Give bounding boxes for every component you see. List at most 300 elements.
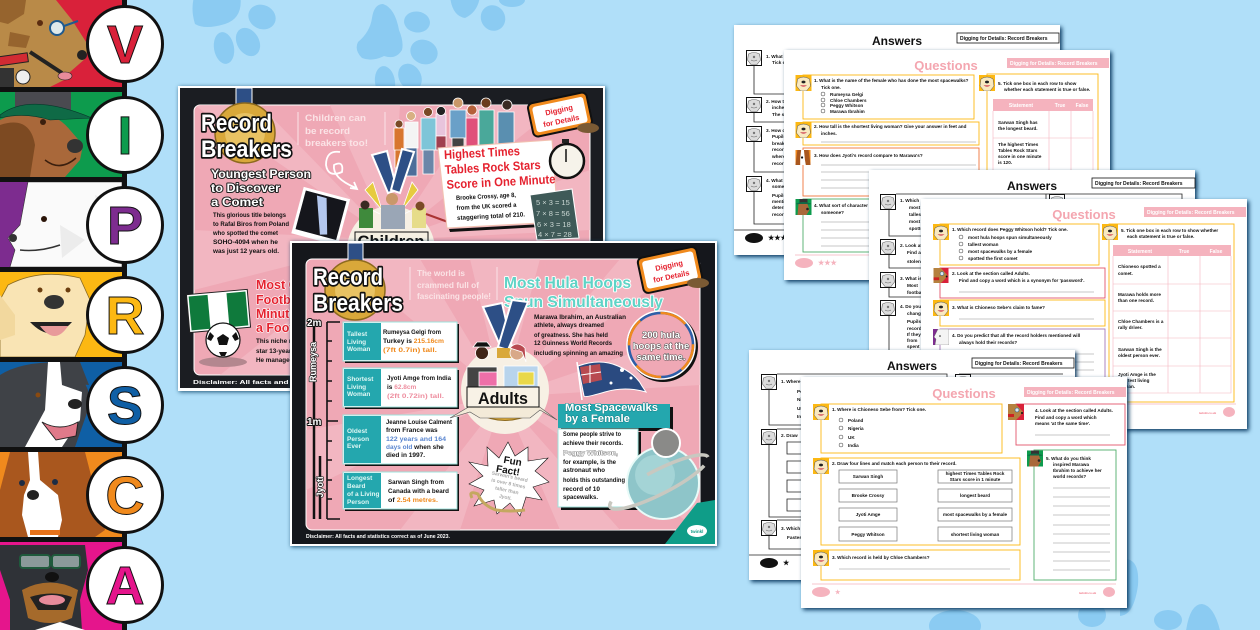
heading: most hula hoops: Spun Simultaneously xyxy=(504,294,663,311)
card: oldest person ever: Oldest xyxy=(347,428,368,435)
title: Breakers xyxy=(313,290,403,317)
intro text xyxy=(417,268,491,301)
answer icons xyxy=(746,50,762,192)
header box xyxy=(957,33,1059,43)
body: comet: This glorious title belongs xyxy=(213,212,286,219)
chalkboard xyxy=(530,189,579,240)
answer text: 2. Look at xyxy=(900,243,922,248)
card: oldest person ever: from France was xyxy=(386,427,438,434)
question 2: 2. How tall is the shortest living woman? Give your answer in feet and xyxy=(814,124,967,129)
card: oldest person ever: Person xyxy=(347,436,369,443)
callout: fun fact: Jyoti. xyxy=(498,493,513,502)
callout: 200 hula hoops xyxy=(627,311,698,382)
card: tallest living woman: Tallest xyxy=(347,331,368,338)
card: longest beard: Beard xyxy=(347,483,365,490)
body: hula hoops xyxy=(534,314,626,357)
question 5 with table: 5. Tick one box in each row to show whether xyxy=(1121,228,1218,233)
card: tallest living woman: Woman xyxy=(347,346,370,353)
answer text: football xyxy=(907,290,924,295)
intro text: Children can xyxy=(305,113,366,124)
question 5 with table: True xyxy=(1055,103,1065,109)
worksheet: questions 1 xyxy=(784,50,1110,280)
question 2 xyxy=(934,268,1105,298)
body: football: star 13-year-old xyxy=(256,348,303,355)
answer text: 3. What is xyxy=(900,276,922,281)
letter badge: R xyxy=(88,278,162,352)
card: longest beard: of a Living xyxy=(347,491,380,498)
answer text: 3. Which xyxy=(781,526,800,531)
heading: Questions xyxy=(914,58,978,73)
answer text: Nigeria xyxy=(797,397,813,402)
header box: Digging for Details: Record Breakers xyxy=(1095,181,1183,187)
disclaimer: Disclaimer: All facts and statistics correct as of June 2023. xyxy=(306,534,450,540)
callout: 200 hula hoops: same time. xyxy=(636,352,686,363)
dirt pile xyxy=(577,123,599,133)
question 3: 3. Which record is held by Chloe Chambers? xyxy=(832,555,930,560)
letter badge: V xyxy=(88,6,162,82)
body: comet xyxy=(212,212,289,255)
logo: ★★★ xyxy=(768,234,788,242)
title xyxy=(313,264,403,317)
answer text: change xyxy=(907,311,924,316)
heading: Questions xyxy=(1052,207,1116,222)
card: longest beard: of 2.54 metres. xyxy=(388,497,438,504)
swirl arrow xyxy=(326,152,357,189)
answer text: India xyxy=(797,414,808,419)
card: shortest living woman: Jyoti Amge from India xyxy=(387,375,451,382)
question 5 with table: oldest person ever. xyxy=(1118,353,1160,358)
footer: twinkl.co.uk xyxy=(1079,591,1097,595)
answer text: 1. Where xyxy=(781,379,801,384)
worksheet: answers 1 xyxy=(734,25,1060,255)
badge: digging for details: for Details xyxy=(652,268,690,285)
worksheet: questions 2 xyxy=(921,199,1247,429)
VIPERS strip xyxy=(0,0,163,630)
card: longest beard: Person xyxy=(347,499,369,506)
intro text xyxy=(305,113,368,149)
note: highest times tables: from the UK scored a xyxy=(456,202,517,212)
question 4: 4. Do you predict that all the record holders mentioned will xyxy=(952,333,1080,338)
answer text: UK xyxy=(797,406,804,411)
badge: digging for details: for Details xyxy=(542,113,580,129)
panel: most spacewalks: for example, is the xyxy=(563,459,617,466)
card: shortest living woman: Shortest xyxy=(347,376,374,383)
callout: fun fact: Sarwan's beard xyxy=(491,470,528,484)
question 5 with table: False xyxy=(1076,103,1089,109)
panel: most spacewalks: astronaut who xyxy=(563,467,605,474)
letter badge: I xyxy=(88,98,162,172)
worksheet: answers 3 xyxy=(749,350,1075,580)
card: tallest living woman: Turkey is 215.16cm xyxy=(383,338,444,345)
card: oldest person ever: Jeanne Louise Calment xyxy=(386,419,453,426)
question 1 xyxy=(796,75,974,119)
letter badge: S: S xyxy=(107,376,143,436)
answer text xyxy=(766,54,801,217)
band: C dog xyxy=(0,452,122,537)
question 1 xyxy=(813,404,1002,453)
card: shortest living woman: is 62.8cm xyxy=(387,384,417,391)
header bar: Digging for Details: Record Breakers xyxy=(1027,390,1115,396)
medal: children xyxy=(347,149,448,294)
callout: 200 hula hoops: 200 hula xyxy=(642,330,681,341)
heading: most goals: Minute by xyxy=(256,307,314,321)
heading: youngest person: a Comet xyxy=(211,195,263,209)
answer icons xyxy=(880,194,1064,316)
header bar xyxy=(1007,58,1109,68)
header box: Digging for Details: Record Breakers xyxy=(975,361,1063,367)
heading: Questions xyxy=(932,386,996,401)
answer text: 2. Draw xyxy=(781,433,798,438)
note: highest times tables: Tables Rock Stars xyxy=(444,158,541,177)
answer text: breaks xyxy=(772,141,788,146)
answer text: 4. What sort xyxy=(766,178,793,183)
header bar: Digging for Details: Record Breakers xyxy=(1147,210,1235,216)
question 3: 3. How does Jyoti's record compare to Marawa's? xyxy=(814,153,923,158)
question 5 with table: score in one minute xyxy=(998,154,1042,159)
question 5: inspired Marawa xyxy=(1053,462,1089,467)
intro text: be record xyxy=(305,126,350,137)
card: tallest living woman xyxy=(343,322,459,363)
question 5: 5. What do you think xyxy=(1046,456,1091,461)
question 5 with table: True xyxy=(1179,249,1189,255)
panel: most spacewalks: Some people strive to xyxy=(563,431,621,438)
card: shortest living woman xyxy=(343,368,459,409)
answer text: Poland xyxy=(797,389,813,394)
letter badge: A: A xyxy=(106,556,144,616)
height ruler xyxy=(307,318,340,519)
heading: most goals xyxy=(256,278,327,335)
answer text: Most xyxy=(907,283,918,288)
question 3 xyxy=(796,148,979,196)
question 1: most hula hoops spun simultaneously xyxy=(968,235,1052,240)
answer text: stolen xyxy=(907,259,921,264)
band: I dog xyxy=(0,92,122,177)
header bar xyxy=(1144,207,1246,217)
band: R dog xyxy=(0,272,122,357)
heading: Answers xyxy=(887,359,937,373)
medal: children: Children xyxy=(358,233,424,251)
question 4: Find and copy a word which xyxy=(1035,415,1097,420)
header bar: Digging for Details: Record Breakers xyxy=(1010,61,1098,67)
answer boxes xyxy=(749,374,1075,555)
medal xyxy=(325,243,385,320)
intro text: The world is xyxy=(417,268,465,278)
question 4: means 'at the same time'. xyxy=(1035,421,1090,426)
answer text: Find and xyxy=(907,250,927,255)
question 3 xyxy=(933,300,1105,326)
answer boxes xyxy=(734,66,1060,230)
question 2: matching: highest Times Tables Rock xyxy=(946,471,1005,476)
heading: most goals: a Footballer xyxy=(256,321,327,335)
callout: fun fact: Fact! xyxy=(495,464,521,479)
question 2: Find and copy a word which is a synonym for 'password'. xyxy=(959,278,1084,283)
answer text: from xyxy=(907,338,917,343)
callout: fun fact xyxy=(469,442,549,516)
answer text: record xyxy=(907,326,922,331)
note: highest times tables xyxy=(438,140,562,232)
logo xyxy=(760,558,790,568)
card: oldest person ever: died in 1997. xyxy=(386,452,425,459)
question 4: 4. Look at the section called Adults. xyxy=(1035,408,1113,413)
question 1: UK xyxy=(848,435,855,440)
answer text: 1. What is xyxy=(766,54,788,59)
card: longest beard: Canada with a beard xyxy=(388,488,449,495)
band: A dog xyxy=(0,542,122,630)
question 3: 3. What is Chioneso Sebe's claim to fame? xyxy=(952,305,1045,310)
answer text: inches. xyxy=(772,105,788,110)
question 1: Tick one. xyxy=(821,85,841,90)
question 5 with table: is 120. xyxy=(998,160,1012,165)
note: highest times tables: staggering total of 210. xyxy=(457,211,525,222)
card: shortest living woman: Living xyxy=(347,384,366,391)
body: comet: who spotted the comet xyxy=(212,230,279,237)
card: shortest living woman: Woman xyxy=(347,391,370,398)
badge: digging for details: Digging xyxy=(544,103,574,117)
title: Record xyxy=(313,264,383,291)
question 5: world records? xyxy=(1052,474,1086,479)
divider line xyxy=(122,0,127,630)
footer xyxy=(812,584,1116,597)
answer text: most xyxy=(909,205,921,210)
height ruler: 1m xyxy=(307,417,322,428)
question 1: 1. Which record does Peggy Whitson hold? Tick one. xyxy=(952,227,1068,232)
title: Breakers xyxy=(201,136,292,163)
question 4 xyxy=(1008,404,1125,445)
answer text: spotted xyxy=(909,226,926,231)
body: hula hoops: athlete, always dreamed xyxy=(534,322,604,329)
footer: twinkl.co.uk xyxy=(1199,411,1217,415)
answer text: Pupils xyxy=(907,319,921,324)
answer text: mention xyxy=(772,199,790,204)
panel: most spacewalks xyxy=(558,402,673,510)
question 5 with table: Tables Rock Stars xyxy=(998,148,1038,153)
question 5 with table: whether each statement is true or false. xyxy=(1003,87,1090,92)
chalkboard: 6 × 3 = 18 xyxy=(537,220,571,229)
question 5 with table: woman. xyxy=(1117,384,1135,389)
body: comet: was just 12 years old. xyxy=(212,248,279,255)
question 1: Peggy Whitson xyxy=(830,103,863,108)
question 5 with table xyxy=(979,74,1098,252)
callout: fun fact: is over 8 times xyxy=(491,477,526,491)
people group xyxy=(394,98,514,176)
answer text: 4. Do you xyxy=(900,304,921,309)
disclaimer: Disclaimer: All facts and statistics correct as of June 2023. xyxy=(193,380,424,386)
question 2: inches. xyxy=(821,131,837,136)
question 5 with table: The highest Times xyxy=(998,142,1039,147)
intro text: crammed full of xyxy=(417,280,479,290)
answer text: Pupils xyxy=(772,134,786,139)
question 2: matching xyxy=(813,458,1020,545)
height ruler: 2m xyxy=(307,318,322,329)
question 1: spotted the first comet xyxy=(968,256,1018,261)
answer text: someone? xyxy=(772,184,796,189)
question 4: always hold their records? xyxy=(959,340,1017,345)
band: P dog xyxy=(0,182,122,267)
answer text: spent xyxy=(907,344,920,349)
answer text: Tick one. xyxy=(772,60,792,65)
intro text: fascinating people! xyxy=(417,291,491,301)
question 5 with table xyxy=(1102,224,1234,402)
chalkboard: 7 × 8 = 56 xyxy=(536,209,570,218)
heading: youngest person xyxy=(211,167,311,209)
note: highest times tables: Highest Times xyxy=(444,144,520,162)
note: highest times tables: Score in One Minute xyxy=(446,172,556,192)
body: hula hoops: including spinning an amazing xyxy=(534,350,623,357)
icon: stopwatch xyxy=(550,139,584,178)
question 2: matching: Brooke Crossy xyxy=(852,493,885,498)
answer text: If they xyxy=(907,332,921,337)
height ruler: Jyoti xyxy=(315,476,325,498)
question 1: India xyxy=(848,443,859,448)
question 1: Marawa Ibrahim xyxy=(830,109,865,114)
panel: most spacewalks: by a Female xyxy=(565,413,630,425)
icon: planet and moon xyxy=(605,429,713,519)
question 1: Chloe Chambers xyxy=(830,98,867,103)
answer boxes xyxy=(889,194,1182,375)
question 5 with table: than one record. xyxy=(1118,298,1154,303)
dirt pile xyxy=(687,278,709,288)
icon: Nigeria flag xyxy=(186,289,251,333)
question 1: tallest woman xyxy=(968,242,999,247)
question 5 with table: rally driver. xyxy=(1118,325,1143,330)
card: shortest living woman: (2ft 0.72in) tall. xyxy=(387,393,444,400)
badge: digging for details xyxy=(637,246,703,294)
header box xyxy=(1092,178,1195,188)
heading: Answers xyxy=(1007,179,1057,193)
medal: adults xyxy=(450,300,557,434)
chalkboard: 4 × 7 = 28 xyxy=(538,230,572,239)
question 5 with table: Chioneso spotted a xyxy=(1118,264,1161,269)
question 5: Ibrahim to achieve her xyxy=(1053,468,1102,473)
answer text: where xyxy=(771,154,786,159)
card: longest beard: Sarwan Singh from xyxy=(388,479,444,486)
callout: fun fact: Fun xyxy=(503,455,523,469)
answer text: determ xyxy=(772,205,788,210)
card: longest beard: Longest xyxy=(347,475,373,482)
answer text: record xyxy=(772,147,787,152)
answer text: tallest xyxy=(909,212,923,217)
question 1: most spacewalks by a female xyxy=(968,249,1033,254)
answer text: Pupils xyxy=(772,193,786,198)
answer text: record xyxy=(772,212,787,217)
worksheet: answers 2 xyxy=(869,170,1195,400)
question 1: 1. Where is Chioneso Sebe from? Tick one. xyxy=(832,407,926,412)
answer text xyxy=(781,379,813,540)
footer xyxy=(795,255,1099,268)
letter badge: I: I xyxy=(117,106,133,166)
header box xyxy=(972,358,1074,368)
card: oldest person ever: Ever xyxy=(347,443,362,450)
worksheet: questions 3 xyxy=(801,377,1127,608)
callout: 200 hula hoops: hoops at the xyxy=(633,341,689,352)
medal xyxy=(215,88,275,163)
letter badge: C xyxy=(88,458,162,532)
note: highest times tables: Brooke Crossy, age 8, xyxy=(456,192,516,202)
question 5 with table: 5. Tick one box in each row to show xyxy=(998,81,1077,86)
question 1 xyxy=(933,224,1099,265)
card: oldest person ever: days old when she xyxy=(386,444,444,451)
body: hula hoops: Marawa Ibrahim, an Australian xyxy=(534,314,626,321)
heading: most hula hoops: Most Hula Hoops xyxy=(504,275,631,292)
question 4 xyxy=(796,199,979,252)
footer: ★★★ xyxy=(818,259,838,267)
callout: fun fact: taller than xyxy=(494,485,519,496)
question 2: 2. Look at the section called Adults. xyxy=(952,271,1030,276)
letter badge: R: R xyxy=(106,286,144,346)
panel: most spacewalks: spacewalks. xyxy=(563,494,598,501)
question 5 with table: each statement is true or false. xyxy=(1127,234,1194,239)
panel: most spacewalks: achieve their records. xyxy=(563,440,623,447)
question 2: matching: 2. Draw four lines and match each person to their record. xyxy=(832,461,957,466)
question 5 with table: Sarwan Singh is the xyxy=(1118,347,1162,352)
question 4: someone? xyxy=(821,210,844,215)
band: V dog xyxy=(0,0,122,87)
question 1: Poland xyxy=(848,418,864,423)
answer text: 2. How tall xyxy=(766,99,789,104)
footer: ★ xyxy=(835,589,841,596)
letter badge: S xyxy=(88,368,162,442)
question 2: matching: Stars score in 1 minute xyxy=(950,477,1001,482)
height ruler: Rumeysa xyxy=(308,341,318,382)
heading: youngest person: Youngest Person xyxy=(211,167,311,181)
panel: most spacewalks: Most Spacewalks xyxy=(565,402,658,414)
question 5 with table: Statement xyxy=(1128,249,1152,255)
question 3 xyxy=(813,550,1020,580)
heading: most goals: Football xyxy=(256,293,305,307)
question 2: matching: Jyoti Amge xyxy=(856,512,881,517)
letter badge: A xyxy=(88,548,162,622)
header bar xyxy=(1024,387,1126,397)
question 5 with table: Chloe Chambers is a xyxy=(1118,319,1164,324)
corner tab with logo xyxy=(665,500,715,544)
body: football: He managed xyxy=(256,357,294,364)
medal: adults: Adults xyxy=(478,389,528,408)
body: football: This niche record xyxy=(256,338,309,345)
heading: Answers xyxy=(872,34,922,48)
chalkboard: 5 × 3 = 15 xyxy=(536,198,570,207)
answer text: The shortest xyxy=(772,112,801,117)
letter badge: C: C xyxy=(106,466,144,526)
answer text: record xyxy=(772,161,787,166)
band: S dog xyxy=(0,362,122,447)
heading: youngest person: to Discover xyxy=(211,181,280,195)
badge: digging for details: Digging xyxy=(654,258,684,273)
footer xyxy=(932,404,1236,417)
question 5 with table: comet. xyxy=(1118,271,1133,276)
corner tab with logo: twinkl xyxy=(691,529,703,534)
question 5 xyxy=(1027,450,1116,580)
intro text: breakers too! xyxy=(305,138,368,149)
body: comet: to Rafal Biros from Poland xyxy=(213,221,289,228)
heading: most hula hoops xyxy=(504,275,663,311)
question 1: Nigeria xyxy=(848,426,864,431)
icon: Australian flag xyxy=(577,362,646,400)
question 2: matching: Peggy Whitson xyxy=(851,532,885,537)
answer text: 3. How does xyxy=(766,128,794,133)
letter badge: P: P xyxy=(107,196,143,256)
question 5 with table: Jyoti Amge is the xyxy=(1118,372,1156,377)
card: tallest living woman: Rumeysa Gelgi from xyxy=(383,329,441,336)
title: Record xyxy=(201,110,272,137)
logo xyxy=(745,233,788,243)
question 2: matching: most spacewalks by a female xyxy=(943,512,1007,517)
card: oldest person ever xyxy=(343,415,459,466)
header box: Digging for Details: Record Breakers xyxy=(960,36,1048,42)
answer text: Fastest xyxy=(787,535,804,540)
body: hula hoops: 12 Guinness World Records xyxy=(534,340,612,347)
card: tallest living woman: (7ft 0.7in) tall. xyxy=(383,347,437,354)
heading: most goals: Most Goals xyxy=(256,278,323,292)
